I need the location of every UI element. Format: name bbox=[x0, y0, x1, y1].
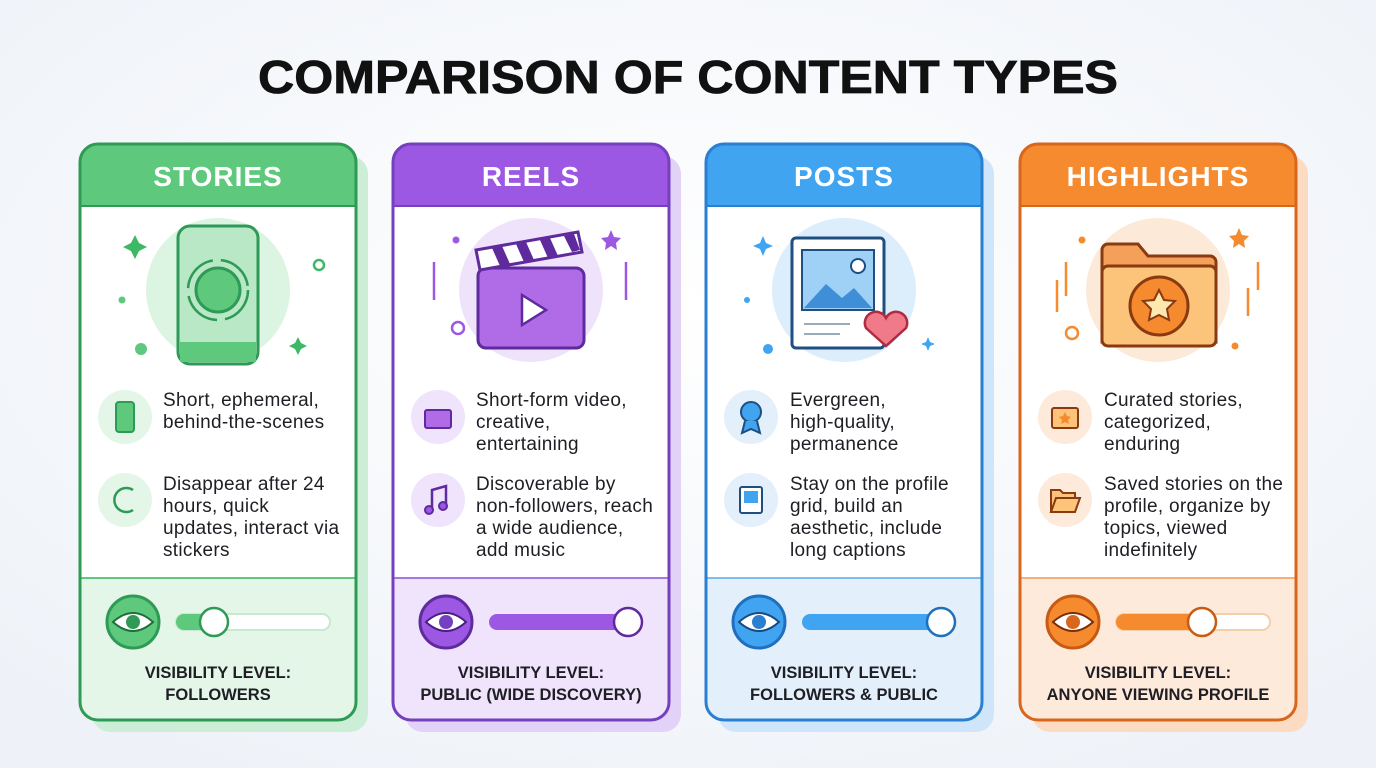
item: curated: enduring bbox=[1104, 434, 1180, 455]
item: profile grid: long captions bbox=[790, 540, 906, 561]
item: saved stories bbox=[1038, 473, 1283, 561]
item: saved stories: Saved stories on the bbox=[1104, 474, 1283, 495]
item: discoverable: non-followers, reach bbox=[476, 496, 653, 517]
label: visibility followers: VISIBILITY LEVEL: bbox=[145, 664, 291, 682]
item: ephemeral: behind-the-scenes bbox=[163, 412, 324, 433]
icon: photo post bbox=[744, 218, 935, 362]
panel: stories bbox=[80, 144, 368, 732]
slider: visibility followers & public bbox=[733, 596, 956, 648]
label: visibility followers & public: FOLLOWERS & PUBLIC bbox=[750, 686, 938, 704]
label: visibility anyone: VISIBILITY LEVEL: bbox=[1085, 664, 1231, 682]
item: disappear bbox=[98, 473, 339, 561]
panel: posts bbox=[706, 144, 994, 732]
item: discoverable: a wide audience, bbox=[476, 518, 623, 539]
label: visibility public: PUBLIC (WIDE DISCOVERY) bbox=[420, 686, 642, 704]
item: profile grid bbox=[724, 473, 949, 561]
panel: reels bbox=[393, 144, 681, 732]
item: curated: Curated stories, bbox=[1104, 390, 1243, 411]
item: curated bbox=[1038, 390, 1243, 455]
icon: clapperboard bbox=[434, 218, 626, 362]
item: saved stories: topics, viewed bbox=[1104, 518, 1228, 539]
heading: stories: STORIES bbox=[153, 161, 283, 192]
item: profile grid: Stay on the profile bbox=[790, 474, 949, 495]
item: evergreen: permanence bbox=[790, 434, 899, 455]
icon: phone bbox=[118, 218, 324, 364]
item: disappear: updates, interact via bbox=[163, 518, 339, 539]
item: evergreen bbox=[724, 390, 899, 455]
item: short-form video bbox=[411, 390, 627, 455]
item: saved stories: indefinitely bbox=[1104, 540, 1198, 561]
label: visibility followers & public: VISIBILITY LEVEL: bbox=[771, 664, 917, 682]
label: visibility anyone: ANYONE VIEWING PROFILE bbox=[1047, 686, 1269, 704]
slider: visibility public bbox=[420, 596, 643, 648]
heading: highlights: HIGHLIGHTS bbox=[1067, 161, 1249, 192]
item: ephemeral: Short, ephemeral, bbox=[163, 390, 319, 411]
item: discoverable: add music bbox=[476, 540, 565, 561]
item: discoverable: Discoverable by bbox=[476, 474, 616, 495]
item: disappear: Disappear after 24 bbox=[163, 474, 325, 495]
item: ephemeral bbox=[98, 390, 324, 444]
item: short-form video: Short-form video, bbox=[476, 390, 627, 411]
title: COMPARISON OF CONTENT TYPES bbox=[258, 51, 1118, 103]
heading: posts: POSTS bbox=[794, 161, 894, 192]
item: profile grid: grid, build an bbox=[790, 496, 903, 517]
item: short-form video: entertaining bbox=[476, 434, 579, 455]
item: saved stories: profile, organize by bbox=[1104, 496, 1271, 517]
heading: reels: REELS bbox=[482, 161, 580, 192]
item: evergreen: Evergreen, bbox=[790, 390, 886, 411]
label: visibility followers: FOLLOWERS bbox=[165, 686, 271, 704]
item: profile grid: aesthetic, include bbox=[790, 518, 942, 539]
item: short-form video: creative, bbox=[476, 412, 551, 433]
panel: highlights bbox=[1020, 144, 1308, 732]
icon: folder with star bbox=[1057, 218, 1258, 362]
label: visibility public: VISIBILITY LEVEL: bbox=[458, 664, 604, 682]
item: discoverable bbox=[411, 473, 653, 561]
slider: visibility anyone bbox=[1047, 596, 1270, 648]
item: curated: categorized, bbox=[1104, 412, 1211, 433]
slider: visibility followers bbox=[107, 596, 330, 648]
item: evergreen: high-quality, bbox=[790, 412, 895, 433]
item: disappear: hours, quick bbox=[163, 496, 269, 517]
item: disappear: stickers bbox=[163, 540, 230, 561]
